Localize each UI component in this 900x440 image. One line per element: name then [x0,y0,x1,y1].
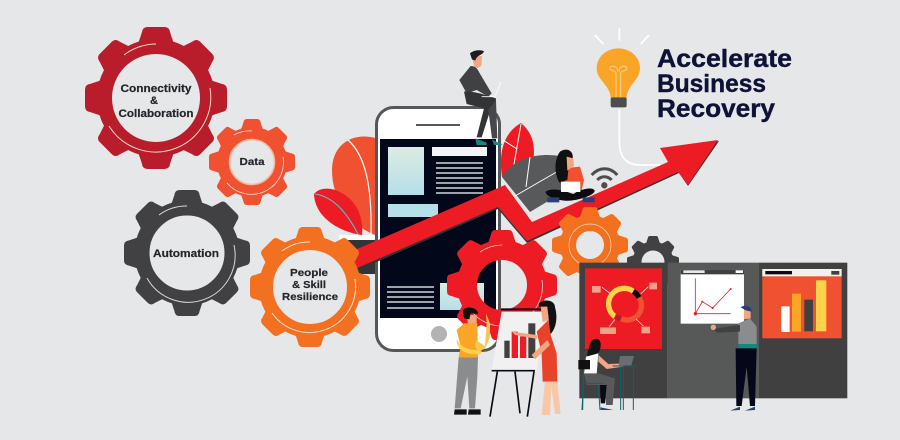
plant: left of phone [314,137,376,274]
label: Connectivity & Collaboration [118,83,194,120]
flipchart bars [504,323,535,358]
gear: Automation [124,190,250,316]
gear: Connectivity & Collaboration [85,27,227,169]
label: People & Skill Resilience: People [290,267,328,279]
panel: line chart [681,269,744,324]
label: Automation: Automation [153,248,219,260]
label: Connectivity & Collaboration: & [150,95,158,107]
plant: right of phone [501,123,575,212]
panel: bar chart [762,269,842,338]
label: Connectivity & Collaboration: Collaboration [118,108,194,120]
label: People & Skill Resilience [282,267,338,303]
title: Accelerate Business Recovery: Recovery [657,95,775,123]
label: Connectivity & Collaboration: Connectivity [120,83,192,95]
figure: man with laptop on phone [459,50,503,145]
gear: Data [209,119,295,205]
gear: small dark [627,236,679,288]
icon: wifi [592,169,617,187]
growth arrow [355,140,719,271]
phone screen: bottom text and image [387,283,484,310]
title: Accelerate Business Recovery: Business [657,70,766,98]
figure: presenter man at wall [711,306,757,411]
presentation wall [579,263,847,398]
phone screen: top image and text [388,147,487,217]
gear: small orange [552,207,628,283]
label: People & Skill Resilience: & Skill [292,279,326,291]
figure: man in yellow [454,308,490,415]
label: Data: Data [240,156,265,168]
figure: woman in red dress [512,300,561,415]
gear: People & Skill Resilience [250,227,370,347]
label: People & Skill Resilience: Resilience [282,291,338,303]
figure: woman at desk [578,339,636,410]
figure: woman with laptop on arrow [546,150,595,202]
figure: flipchart easel [490,309,545,417]
title: Accelerate Business Recovery: Accelerate [657,45,792,73]
panel: donut chart [585,268,662,349]
title: Accelerate Business Recovery [657,45,792,123]
phone [376,108,500,350]
lightbulb with wire [595,28,660,165]
gear: large red [447,230,557,340]
